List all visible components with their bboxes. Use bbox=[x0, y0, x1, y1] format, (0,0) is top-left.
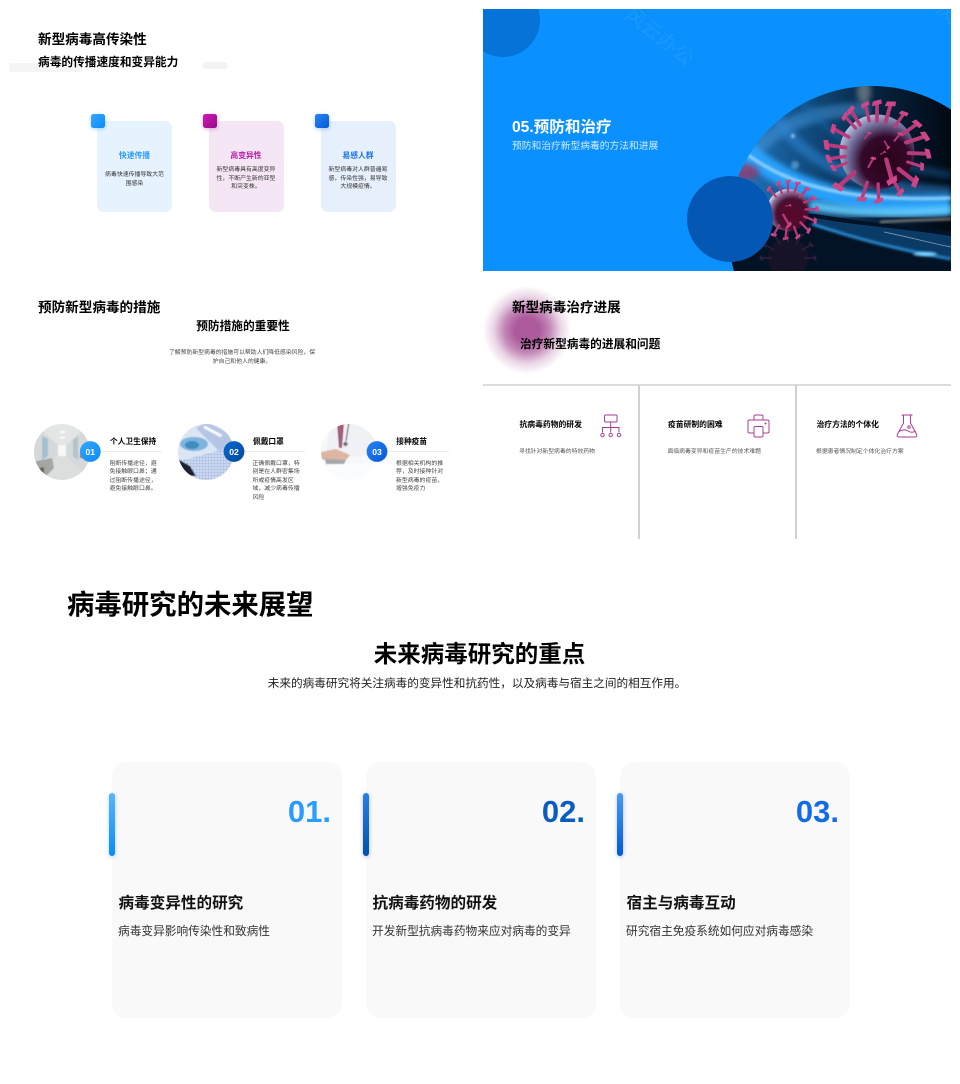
column icons bbox=[600, 414, 918, 438]
card 01 heading: 病毒变异性的研究 bbox=[118, 894, 243, 912]
accent bar 03 bbox=[617, 793, 622, 856]
intro text: 了解预防新型病毒的措施可以帮助人们降低感染风险，保护自己和他人的健康。 bbox=[169, 350, 315, 365]
column 3 heading: 治疗方法的个体化 bbox=[816, 420, 879, 429]
column 1 heading: 抗病毒药物的研发 bbox=[520, 420, 582, 429]
photo: doctor bbox=[321, 424, 374, 465]
number 01: 01. bbox=[288, 794, 331, 828]
card heading: 易感人群 bbox=[342, 150, 374, 160]
card icon square 1 bbox=[90, 114, 104, 128]
measure 3 heading: 接种疫苗 bbox=[396, 437, 427, 446]
card 03 heading: 宿主与病毒互动 bbox=[626, 894, 736, 912]
badge 01 bbox=[80, 441, 162, 462]
subtitle: 病毒的传播速度和变异能力 bbox=[38, 56, 178, 68]
icon: org chart bbox=[601, 415, 621, 437]
column 3 text: 根据患者情况制定个体化治疗方案 bbox=[816, 449, 904, 455]
section title: 05.预防和治疗 bbox=[512, 118, 612, 136]
measure 3 text: 根据相关机构的推荐，及时接种针对新型病毒的疫苗，增强免疫力 bbox=[396, 461, 443, 492]
virus reflection bbox=[759, 230, 817, 271]
card text: 病毒快速传播导致大范围感染 bbox=[105, 172, 164, 186]
measure 1 heading: 个人卫生保持 bbox=[110, 437, 156, 446]
card 03 bbox=[620, 762, 850, 1018]
large virus bbox=[822, 99, 932, 204]
badge 02 bbox=[224, 441, 305, 462]
card 02 text: 开发新型抗病毒药物来应对病毒的变异 bbox=[372, 924, 571, 938]
badge 01: 01 bbox=[86, 447, 95, 457]
card text: 新型病毒对人群普遍易感，传染性强，易导致大规模疫情。 bbox=[329, 167, 387, 190]
subtitle: 治疗新型病毒的进展和问题 bbox=[520, 338, 660, 350]
number 03: 03. bbox=[796, 794, 839, 828]
measure 2 heading: 佩戴口罩 bbox=[253, 437, 284, 446]
title: 新型病毒治疗进展 bbox=[512, 300, 621, 314]
measure 1 text: 阻断传播途径，避免接触眼口鼻；通过阻断传播途径，避免接触眼口鼻。 bbox=[110, 461, 157, 492]
card 01 bbox=[112, 762, 342, 1018]
decorative bar left bbox=[9, 63, 82, 72]
panel: section 05 cover bbox=[483, 9, 951, 271]
number 02: 02. bbox=[542, 794, 585, 828]
heading: 未来病毒研究的重点 bbox=[374, 641, 585, 667]
card heading: 高变异性 bbox=[230, 150, 262, 160]
watermark bbox=[621, 0, 960, 70]
card 01 text: 病毒变异影响传染性和致病性 bbox=[118, 924, 270, 938]
decorative pill right bbox=[202, 62, 228, 69]
card 02 heading: 抗病毒药物的研发 bbox=[372, 894, 497, 912]
measure 2 text: 正确佩戴口罩，特别是在人群密集场所或疫情高发区域，减少病毒传播风险 bbox=[252, 461, 300, 501]
surface spikes bbox=[884, 140, 890, 150]
card icon square 3 bbox=[314, 114, 328, 128]
small virus bbox=[765, 179, 820, 241]
column 2 text: 面临病毒变异和疫苗生产的技术难题 bbox=[668, 449, 761, 455]
badge 03: 03 bbox=[372, 447, 382, 457]
overlapping blue circle bbox=[687, 176, 773, 262]
title: 新型病毒高传染性 bbox=[38, 32, 147, 46]
card heading: 快速传播 bbox=[119, 150, 150, 160]
panel: prevention measures bbox=[34, 300, 449, 501]
icon: flask bbox=[897, 415, 917, 437]
heading: 预防措施的重要性 bbox=[196, 320, 290, 332]
card 02 bbox=[366, 762, 596, 1018]
accent bar 02 bbox=[363, 793, 368, 856]
photo: hospital corridor bbox=[34, 424, 88, 480]
virus illustration bbox=[483, 9, 951, 271]
horizontal rule bbox=[483, 384, 951, 386]
vertical rule 1 bbox=[638, 385, 640, 539]
photos and badges bbox=[34, 424, 449, 480]
panel: future of virus research bbox=[67, 589, 839, 938]
panel: treatment progress bbox=[483, 288, 951, 539]
card icon square 2 bbox=[202, 114, 216, 128]
title: 预防新型病毒的措施 bbox=[38, 300, 160, 314]
section subtitle: 预防和治疗新型病毒的方法和进展 bbox=[512, 140, 658, 152]
column 2 heading: 疫苗研制的困难 bbox=[668, 420, 723, 429]
corner circle bbox=[466, 0, 540, 57]
column 1 text: 寻找针对新型病毒的特效药物 bbox=[519, 449, 595, 455]
card 03 text: 研究宿主免疫系统如何应对病毒感染 bbox=[626, 924, 813, 938]
panel: high transmissibility bbox=[9, 32, 396, 212]
icon: printer bbox=[748, 415, 769, 437]
badge 02: 02 bbox=[229, 447, 239, 457]
vertical rule 2 bbox=[795, 385, 797, 539]
accent bar 01 bbox=[109, 793, 114, 856]
photo circle bbox=[732, 86, 951, 271]
card text: 新型病毒具有高度变异性，不断产生新的亚型和突变株。 bbox=[217, 167, 275, 190]
photo: lab samples bbox=[178, 424, 232, 480]
glows bbox=[740, 110, 870, 170]
intro text: 未来的病毒研究将关注病毒的变异性和抗药性，以及病毒与宿主之间的相互作用。 bbox=[268, 676, 686, 690]
blurred magenta glow bbox=[483, 286, 571, 374]
card: susceptible population bbox=[320, 121, 396, 212]
badge 03 bbox=[367, 441, 449, 462]
title: 病毒研究的未来展望 bbox=[67, 589, 314, 620]
card: high variability bbox=[208, 121, 284, 212]
card: fast spread bbox=[97, 121, 172, 212]
